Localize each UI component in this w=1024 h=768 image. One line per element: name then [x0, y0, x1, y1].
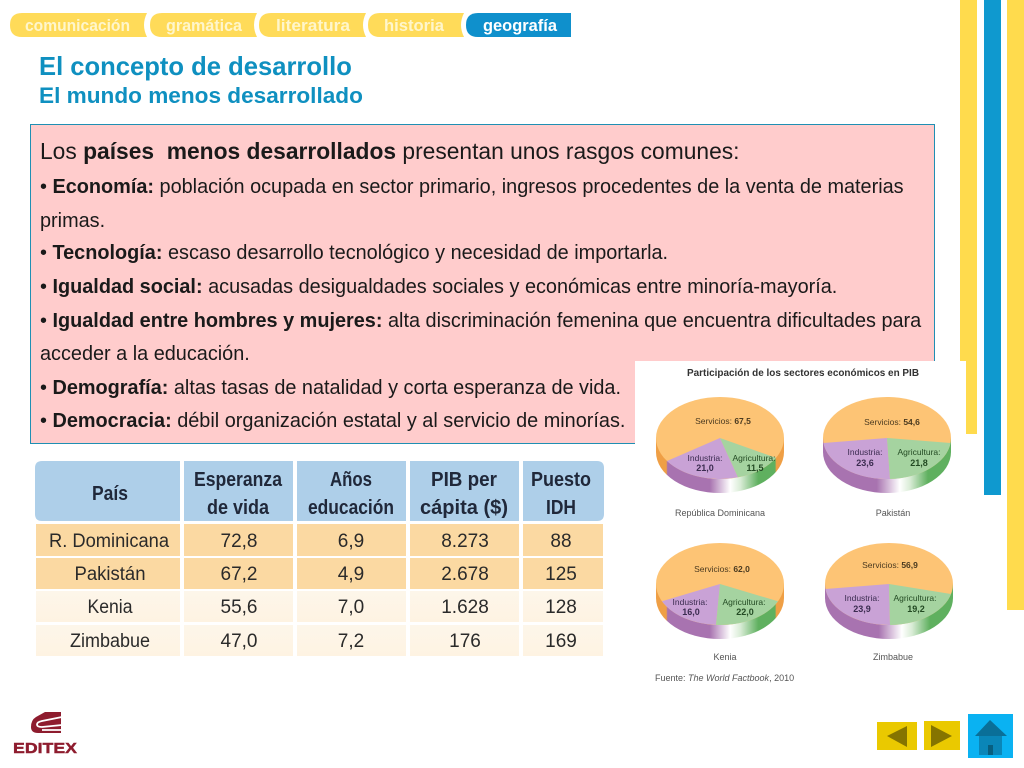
pie: Kenia: Agricultura:	[722, 597, 766, 607]
data table: 55,6	[221, 597, 257, 618]
pie: República Dominicana: Industria:	[688, 453, 722, 463]
pie: Kenia: 22,0	[736, 607, 754, 617]
pie: Pakistán: Pakistán	[876, 508, 910, 518]
data table: 6,9	[338, 531, 364, 552]
navigation tabs: comunicación	[25, 16, 130, 35]
data table: 7,2	[338, 631, 364, 652]
subtitle: El mundo menos desarrollado	[39, 83, 363, 108]
button: previous	[877, 722, 917, 750]
pie: Kenia: Industria:	[673, 597, 707, 607]
data table: PIB per	[431, 469, 497, 491]
data table: Puesto	[531, 469, 591, 491]
pie: Pakistán: Agricultura:	[898, 447, 940, 457]
pie: Pakistán: 23,6	[856, 458, 874, 468]
chart title: Participación de los sectores económicos en PIB	[687, 367, 919, 379]
button: next	[924, 721, 960, 750]
text block: rasgos comunes: • Demografía: altas tasas de natalidad y corta esperanza de vida.	[40, 377, 621, 399]
data table: Kenia	[88, 597, 133, 618]
text block: rasgos comunes: • Democracia: débil organización estatal y al servicio de minorías.	[40, 410, 625, 432]
data table: Zimbabue	[70, 631, 150, 652]
data table: 176	[449, 631, 481, 652]
text block: rasgos comunes	[40, 138, 922, 432]
data table: cápita ($)	[420, 497, 508, 519]
navigation tabs: gramática	[166, 16, 243, 35]
data table: 169	[545, 631, 577, 652]
data table: Años	[330, 469, 372, 491]
text block: rasgos comunes: • Igualdad entre hombres y mujeres: alta discriminación femenina que encuentra dificultades para	[40, 310, 921, 332]
pie: Zimbabue: Industria:	[845, 593, 879, 603]
pie: República Dominicana	[656, 397, 784, 518]
text block: rasgos comunes: acceder a la educación.	[40, 343, 250, 365]
pie: República Dominicana: 21,0	[696, 463, 714, 473]
text block: rasgos comunes: Los países menos desarrollados presentan unos rasgos comunes:	[40, 138, 740, 164]
pie: Kenia: Kenia	[713, 652, 737, 662]
pie: Kenia: Servicios: 62,0	[694, 564, 750, 574]
title: El concepto de desarrollo	[39, 53, 352, 81]
text block: rasgos comunes: • Economía: población ocupada en sector primario, ingresos procedentes de la venta de materias	[40, 176, 904, 198]
data table	[35, 461, 604, 656]
data table: 128	[545, 597, 577, 618]
pie: Pakistán: Industria:	[848, 447, 882, 457]
data table: 72,8	[221, 531, 257, 552]
data table: 4,9	[338, 564, 364, 585]
pie: Zimbabue	[825, 543, 953, 662]
source note: Fuente: The World Factbook, 2010	[655, 673, 794, 683]
text block: rasgos comunes: • Igualdad social: acusadas desigualdades sociales y económicas entre minoría-mayoría.	[40, 276, 837, 298]
data table: 7,0	[338, 597, 364, 618]
pie: Pakistán	[823, 397, 951, 518]
pie: Pakistán: 21,8	[910, 458, 928, 468]
navigation tabs: historia	[384, 16, 445, 35]
data table: 125	[545, 564, 577, 585]
data table: educación	[308, 497, 394, 519]
navigation tabs	[10, 13, 571, 37]
side stripes	[960, 0, 1024, 610]
button: home	[968, 714, 1013, 758]
data table: 88	[550, 531, 572, 552]
text block: rasgos comunes: • Tecnología: escaso desarrollo tecnológico y necesidad de importarla.	[40, 242, 668, 264]
pie: Zimbabue: Agricultura:	[894, 593, 936, 603]
pie: Zimbabue: 23,9	[853, 604, 871, 614]
pie: Zimbabue: 19,2	[907, 604, 925, 614]
data table: de vida	[207, 497, 270, 519]
pie: República Dominicana: 11,5	[746, 463, 764, 473]
pie: Kenia	[656, 543, 784, 662]
logo: Editex	[13, 712, 78, 756]
panel: rasgos comunes	[30, 124, 935, 444]
data table: 8.273	[441, 531, 489, 552]
data table: País	[92, 483, 128, 505]
navigation tabs: geografía	[483, 16, 558, 35]
data table: 1.628	[441, 597, 489, 618]
data table: IDH	[546, 497, 576, 519]
data table: R. Dominicana	[49, 531, 169, 552]
data table: Pakistán	[74, 564, 146, 585]
pie: Zimbabue: Servicios: 56,9	[862, 560, 918, 570]
text block: rasgos comunes: primas.	[40, 210, 105, 232]
pie: República Dominicana: Servicios: 67,5	[695, 416, 751, 426]
navigation tabs: literatura	[276, 16, 351, 35]
data table: 67,2	[221, 564, 257, 585]
panel: pie charts	[635, 361, 966, 683]
pie: Zimbabue: Zimbabue	[873, 652, 913, 662]
data table: 2.678	[441, 564, 489, 585]
pie: República Dominicana: República Dominicana	[675, 508, 765, 518]
pie: República Dominicana: Agricultura:	[732, 453, 776, 463]
pie: Pakistán: Servicios: 54,6	[864, 417, 920, 427]
pie: Kenia: 16,0	[682, 607, 700, 617]
data table: Esperanza	[194, 469, 283, 491]
data table: 47,0	[221, 631, 257, 652]
